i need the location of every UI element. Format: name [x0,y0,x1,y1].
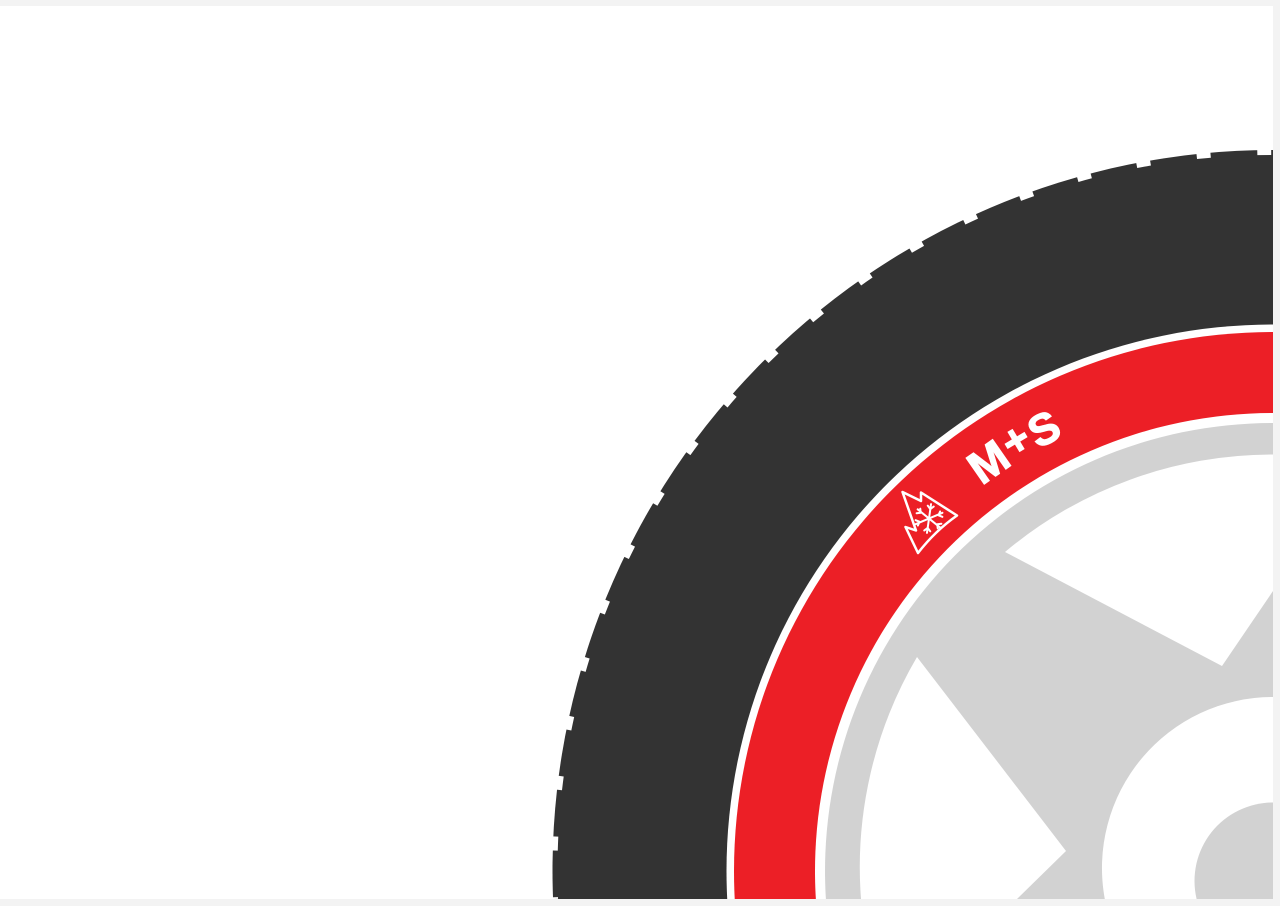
wheel opening: left window [860,657,1066,899]
tire tread notches [553,150,1273,899]
M+S marking: + [1004,428,1028,452]
white gap around sidewall [727,324,1273,899]
snowflake [914,502,944,535]
wheel hub: white ring [1102,697,1273,899]
tire and wheel illustration [552,150,1273,899]
M+S marking: S [1028,412,1060,446]
mountain outline [902,492,957,553]
red sidewall band [734,332,1273,899]
wheel rim: grey disc [825,423,1273,899]
tire: dark rubber [552,150,1273,899]
wheel opening: upper window [1005,454,1273,666]
wheel hub: grey centre [1195,802,1273,899]
icon: three-peak mountain snowflake [902,492,957,553]
M+S marking: M [965,438,1012,485]
white gap inside sidewall [815,413,1273,899]
